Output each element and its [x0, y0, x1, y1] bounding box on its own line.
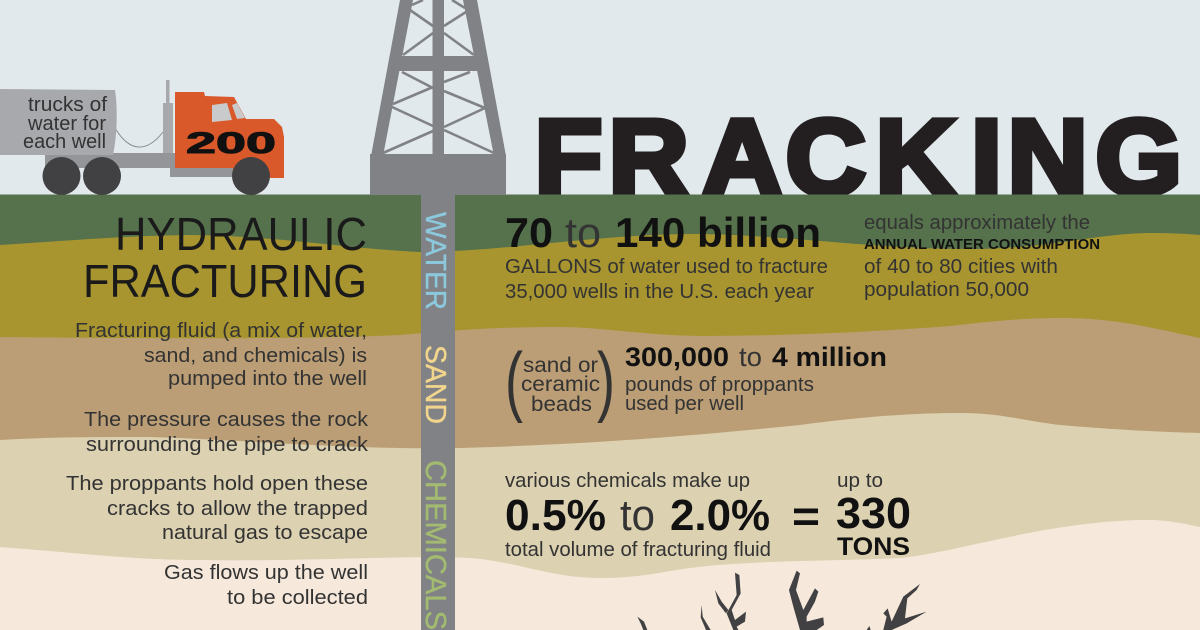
number: 200 trucks: 200	[186, 127, 276, 160]
text block: process steps	[66, 319, 369, 609]
stat: 330 tons: 330	[836, 489, 911, 538]
callout: sand or ceramic beads	[505, 336, 615, 424]
callout: sand or ceramic beads: )	[597, 336, 615, 424]
stat: chemicals percentage: 0.5%	[505, 491, 606, 540]
sky background	[0, 0, 1200, 196]
truck cab	[175, 92, 284, 178]
truck hose	[115, 128, 163, 147]
stat: proppants: pounds of proppants	[625, 374, 814, 396]
stat: 330 tons: up to	[837, 470, 883, 492]
stat: chemicals percentage: to	[620, 491, 655, 540]
stat: water volume: GALLONS of water used to fracture	[505, 256, 828, 278]
stat: annual water consumption: of 40 to 80 cities with	[864, 256, 1058, 278]
step 1	[75, 319, 367, 390]
stat: chemicals percentage: 2.0%	[670, 491, 770, 540]
step 3: natural gas to escape	[162, 521, 368, 544]
callout: sand or ceramic beads: ceramic	[521, 373, 600, 396]
stat: annual water consumption: ANNUAL WATER CONSUMPTION	[864, 236, 1100, 253]
truck tank	[0, 89, 117, 155]
step 2: surrounding the pipe to crack	[86, 433, 369, 456]
step 3: cracks to allow the trapped	[107, 497, 368, 520]
step 4	[164, 561, 368, 609]
icon: drilling derrick and well pipe	[370, 0, 506, 630]
callout: sand or ceramic beads: beads	[531, 393, 592, 416]
step 3	[66, 472, 368, 544]
step 1: Fracturing fluid (a mix of water,	[75, 319, 367, 342]
truck label: trucks of	[28, 94, 107, 116]
pipe label: chemicals: CHEMICALS	[419, 460, 451, 630]
stat: annual water consumption: population 50,000	[864, 279, 1029, 301]
stat: water volume: 140 billion	[615, 209, 821, 256]
truck label: each well	[23, 131, 106, 153]
callout: sand or ceramic beads: (	[505, 336, 523, 424]
stat: annual water consumption: equals approximately the	[864, 212, 1090, 234]
stat: chemicals percentage: various chemicals make up	[505, 470, 750, 492]
truck chassis	[45, 153, 235, 177]
stat: water volume: to	[565, 209, 601, 256]
title: FRACKING: FRACKING	[535, 98, 1182, 218]
truck label: water for	[27, 113, 106, 135]
pipe label: sand: SAND	[419, 345, 451, 424]
step 4: to be collected	[227, 586, 368, 609]
truck label	[23, 94, 107, 153]
stat: 330 tons	[836, 470, 911, 561]
stat: proppants	[625, 342, 887, 415]
step 2	[84, 408, 369, 456]
heading: hydraulic fracturing: FRACTURING	[83, 255, 367, 307]
stat: chemicals percentage	[505, 470, 771, 561]
stat: chemicals percentage: total volume of fracturing fluid	[505, 539, 771, 561]
stat: proppants: 300,000	[625, 342, 729, 372]
pipe label: water: WATER	[419, 212, 451, 310]
truck windows	[212, 103, 245, 122]
step 3: The proppants hold open these	[66, 472, 368, 495]
stat: water volume: 35,000 wells in the U.S. each year	[505, 281, 814, 303]
icon: rock fractures	[637, 571, 927, 630]
heading: hydraulic fracturing: HYDRAULIC	[115, 208, 367, 260]
stat: proppants: 4 million	[772, 342, 887, 372]
icon: water truck	[0, 80, 284, 195]
truck exhaust stack	[163, 80, 173, 153]
callout: sand or ceramic beads: sand or	[523, 354, 598, 377]
stat: 330 tons: TONS	[837, 533, 910, 561]
truck wheels	[42, 157, 270, 195]
equals sign: =	[792, 492, 820, 541]
stat: proppants: used per well	[625, 393, 744, 415]
step 1: sand, and chemicals) is	[144, 344, 367, 367]
step 2: The pressure causes the rock	[84, 408, 369, 431]
stat: water volume: 70	[505, 209, 553, 256]
stat: water volume	[505, 209, 828, 303]
stat: proppants: to	[739, 342, 762, 372]
step 4: Gas flows up the well	[164, 561, 368, 584]
stat: annual water consumption	[864, 212, 1100, 301]
pipe labels	[419, 212, 451, 630]
soil layers	[0, 194, 1200, 630]
heading: hydraulic fracturing	[83, 208, 367, 307]
step 1: pumped into the well	[168, 367, 367, 390]
